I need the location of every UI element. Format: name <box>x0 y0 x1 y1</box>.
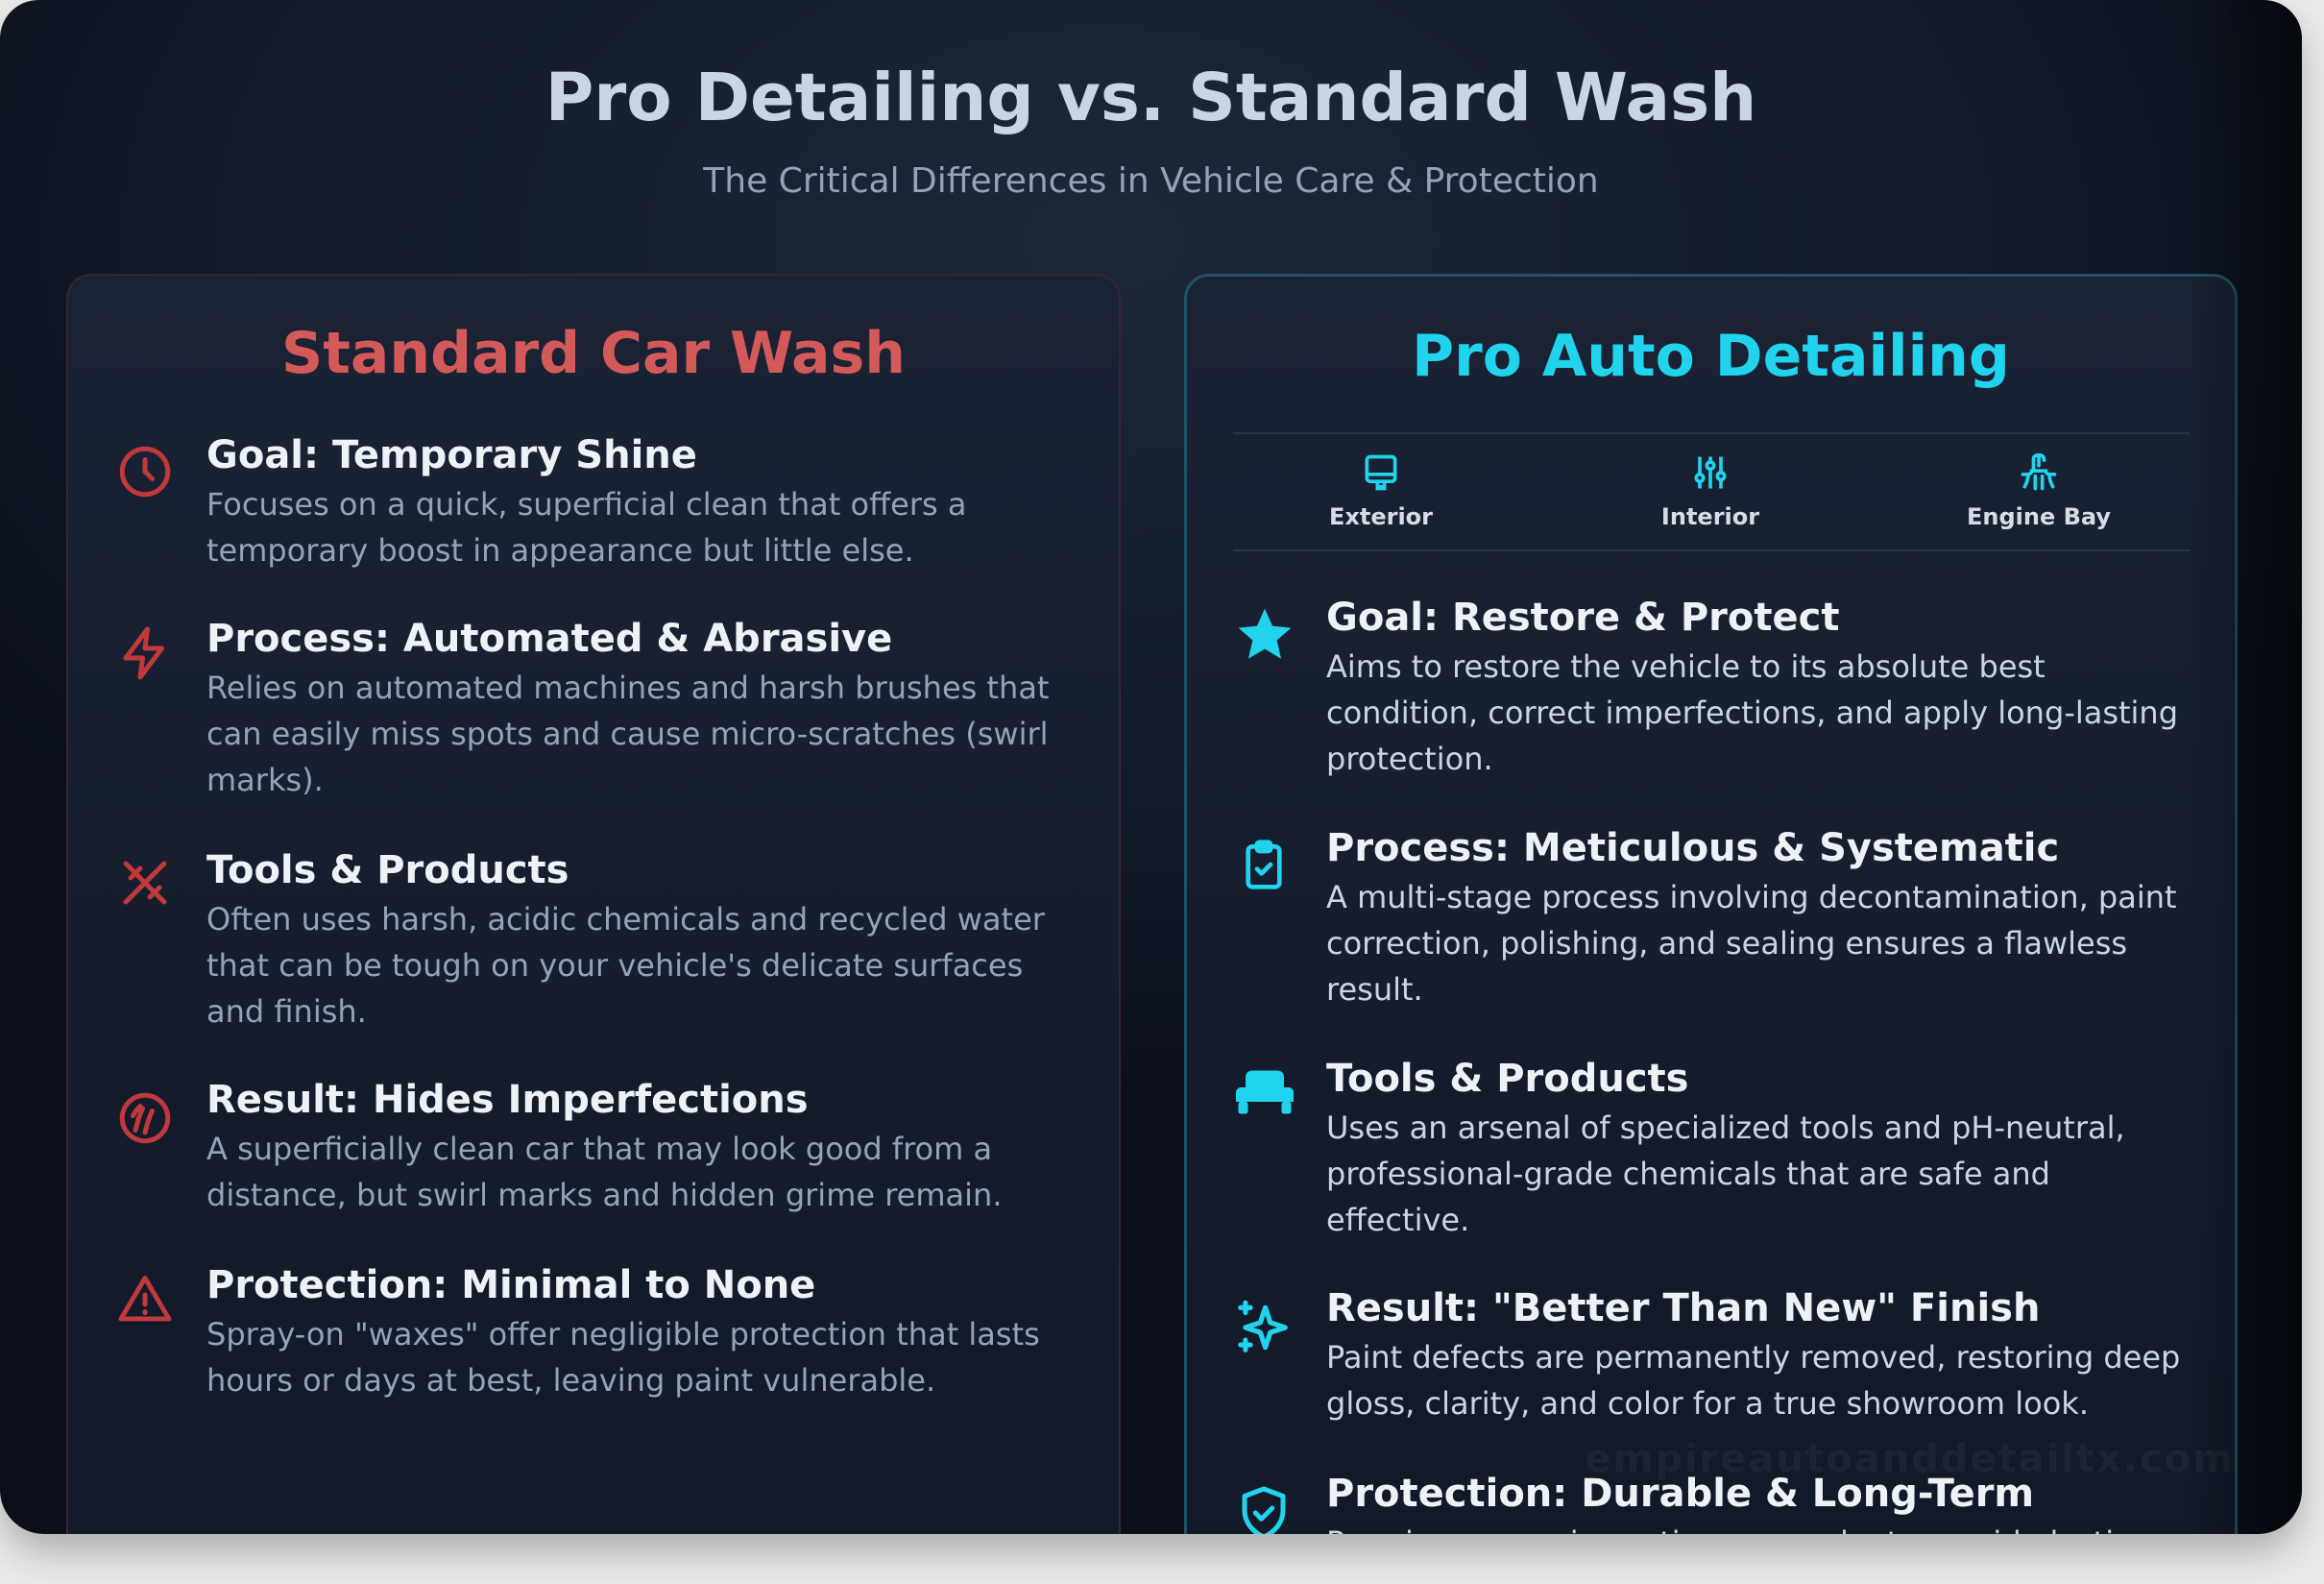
panel: pro auto detailing: Aims to restore the vehicle to its absolute best <box>1326 648 2046 685</box>
panel: standard car wash <box>66 274 1121 1584</box>
panel: standard car wash: and finish. <box>206 993 367 1030</box>
panel: standard car wash: that can be tough on your vehicle's delicate surfaces <box>206 947 1023 984</box>
tab: engine bay <box>1967 453 2111 530</box>
icon: sparkles <box>1238 1301 1288 1352</box>
panel: standard car wash: Relies on automated machines and harsh brushes that <box>206 670 1049 706</box>
panel: pro auto detailing: A multi-stage process involving decontamination, paint <box>1326 879 2177 915</box>
panel: standard car wash: distance, but swirl marks and hidden grime remain. <box>206 1177 1002 1213</box>
panel: standard car wash: Spray-on "waxes" offer negligible protection that lasts <box>206 1316 1040 1352</box>
item: tools <box>123 848 1045 1030</box>
icon: lightning <box>123 626 164 680</box>
panel: standard car wash: hours or days at best, leaving paint vulnerable. <box>206 1362 935 1399</box>
panel: standard car wash: Result: Hides Imperfections <box>206 1078 809 1122</box>
panel: pro auto detailing: correction, polishing, and sealing ensures a flawless <box>1326 925 2127 962</box>
item: protection <box>1243 1472 2153 1534</box>
item: process <box>1246 826 2177 1008</box>
icon: smudge <box>119 1093 171 1143</box>
panel: pro auto detailing: protection. <box>1326 741 1493 777</box>
panel: standard car wash: can easily miss spots and cause micro-scratches (swirl <box>206 716 1049 752</box>
panel: pro auto detailing: professional-grade chemicals that are safe and <box>1326 1156 2050 1192</box>
tab: exterior <box>1329 455 1433 530</box>
tab: interior <box>1661 457 1759 530</box>
panel: standard car wash: A superficially clean car that may look good from a <box>206 1131 992 1167</box>
panel: pro auto detailing <box>1184 274 2238 1584</box>
icon: shield check <box>1243 1487 1285 1534</box>
icon: car seat <box>1236 1070 1294 1114</box>
panel: standard car wash: Protection: Minimal to None <box>206 1263 815 1307</box>
panel: standard car wash: Process: Automated & Abrasive <box>206 617 892 661</box>
tab: engine bay: Engine Bay <box>1967 503 2111 530</box>
tab: exterior: Exterior <box>1329 503 1433 530</box>
panel: pro auto detailing: Paint defects are permanently removed, restoring deep <box>1326 1339 2180 1376</box>
tabs row <box>1233 432 2190 551</box>
icon: warning <box>119 1276 171 1322</box>
watermark: empireautoanddetailtx.com <box>1586 1437 2235 1481</box>
panel: standard car wash: Focuses on a quick, superficial clean that offers a <box>206 486 966 523</box>
panel: standard car wash: Goal: Temporary Shine <box>206 433 697 477</box>
item: protection <box>119 1263 1040 1399</box>
title: Pro Detailing vs. Standard Wash <box>545 60 1756 136</box>
tab: interior: Interior <box>1661 503 1759 530</box>
panel: standard car wash: Tools & Products <box>206 848 569 892</box>
panel: standard car wash: temporary boost in appearance but little else. <box>206 532 914 569</box>
subtitle: The Critical Differences in Vehicle Care & Protection <box>703 161 1599 201</box>
panel: pro auto detailing: effective. <box>1326 1202 1469 1238</box>
panel: pro auto detailing: Process: Meticulous & Systematic <box>1326 826 2059 870</box>
item: result <box>119 1078 1002 1213</box>
panel: pro auto detailing: Protection: Durable & Long-Term <box>1326 1472 2034 1516</box>
panel: pro auto detailing: Tools & Products <box>1326 1057 1688 1101</box>
heading: pro auto detailing: Pro Auto Detailing <box>1412 323 2010 390</box>
panel: pro auto detailing: Uses an arsenal of specialized tools and pH-neutral, <box>1326 1109 2125 1146</box>
item: goal <box>119 433 966 569</box>
item: goal <box>1239 596 2178 777</box>
panel: standard car wash: Often uses harsh, acidic chemicals and recycled water <box>206 901 1045 938</box>
icon: clipboard check <box>1246 840 1282 889</box>
panel: pro auto detailing: Result: "Better Than New" Finish <box>1326 1286 2040 1330</box>
item: result <box>1238 1286 2180 1422</box>
icon: crossed tools <box>123 861 167 905</box>
panel: standard car wash: marks). <box>206 762 324 798</box>
icon: clock <box>119 446 171 498</box>
item: tools <box>1236 1057 2125 1238</box>
panel: pro auto detailing: Goal: Restore & Protect <box>1326 596 1839 640</box>
panel: pro auto detailing: condition, correct imperfections, and apply long-lasting <box>1326 695 2178 731</box>
icon: star <box>1239 609 1291 659</box>
heading: standard car wash: Standard Car Wash <box>281 320 906 387</box>
item: process <box>123 617 1049 798</box>
panel: pro auto detailing: result. <box>1326 971 1423 1008</box>
panel: pro auto detailing: gloss, clarity, and color for a true showroom look. <box>1326 1385 2089 1422</box>
